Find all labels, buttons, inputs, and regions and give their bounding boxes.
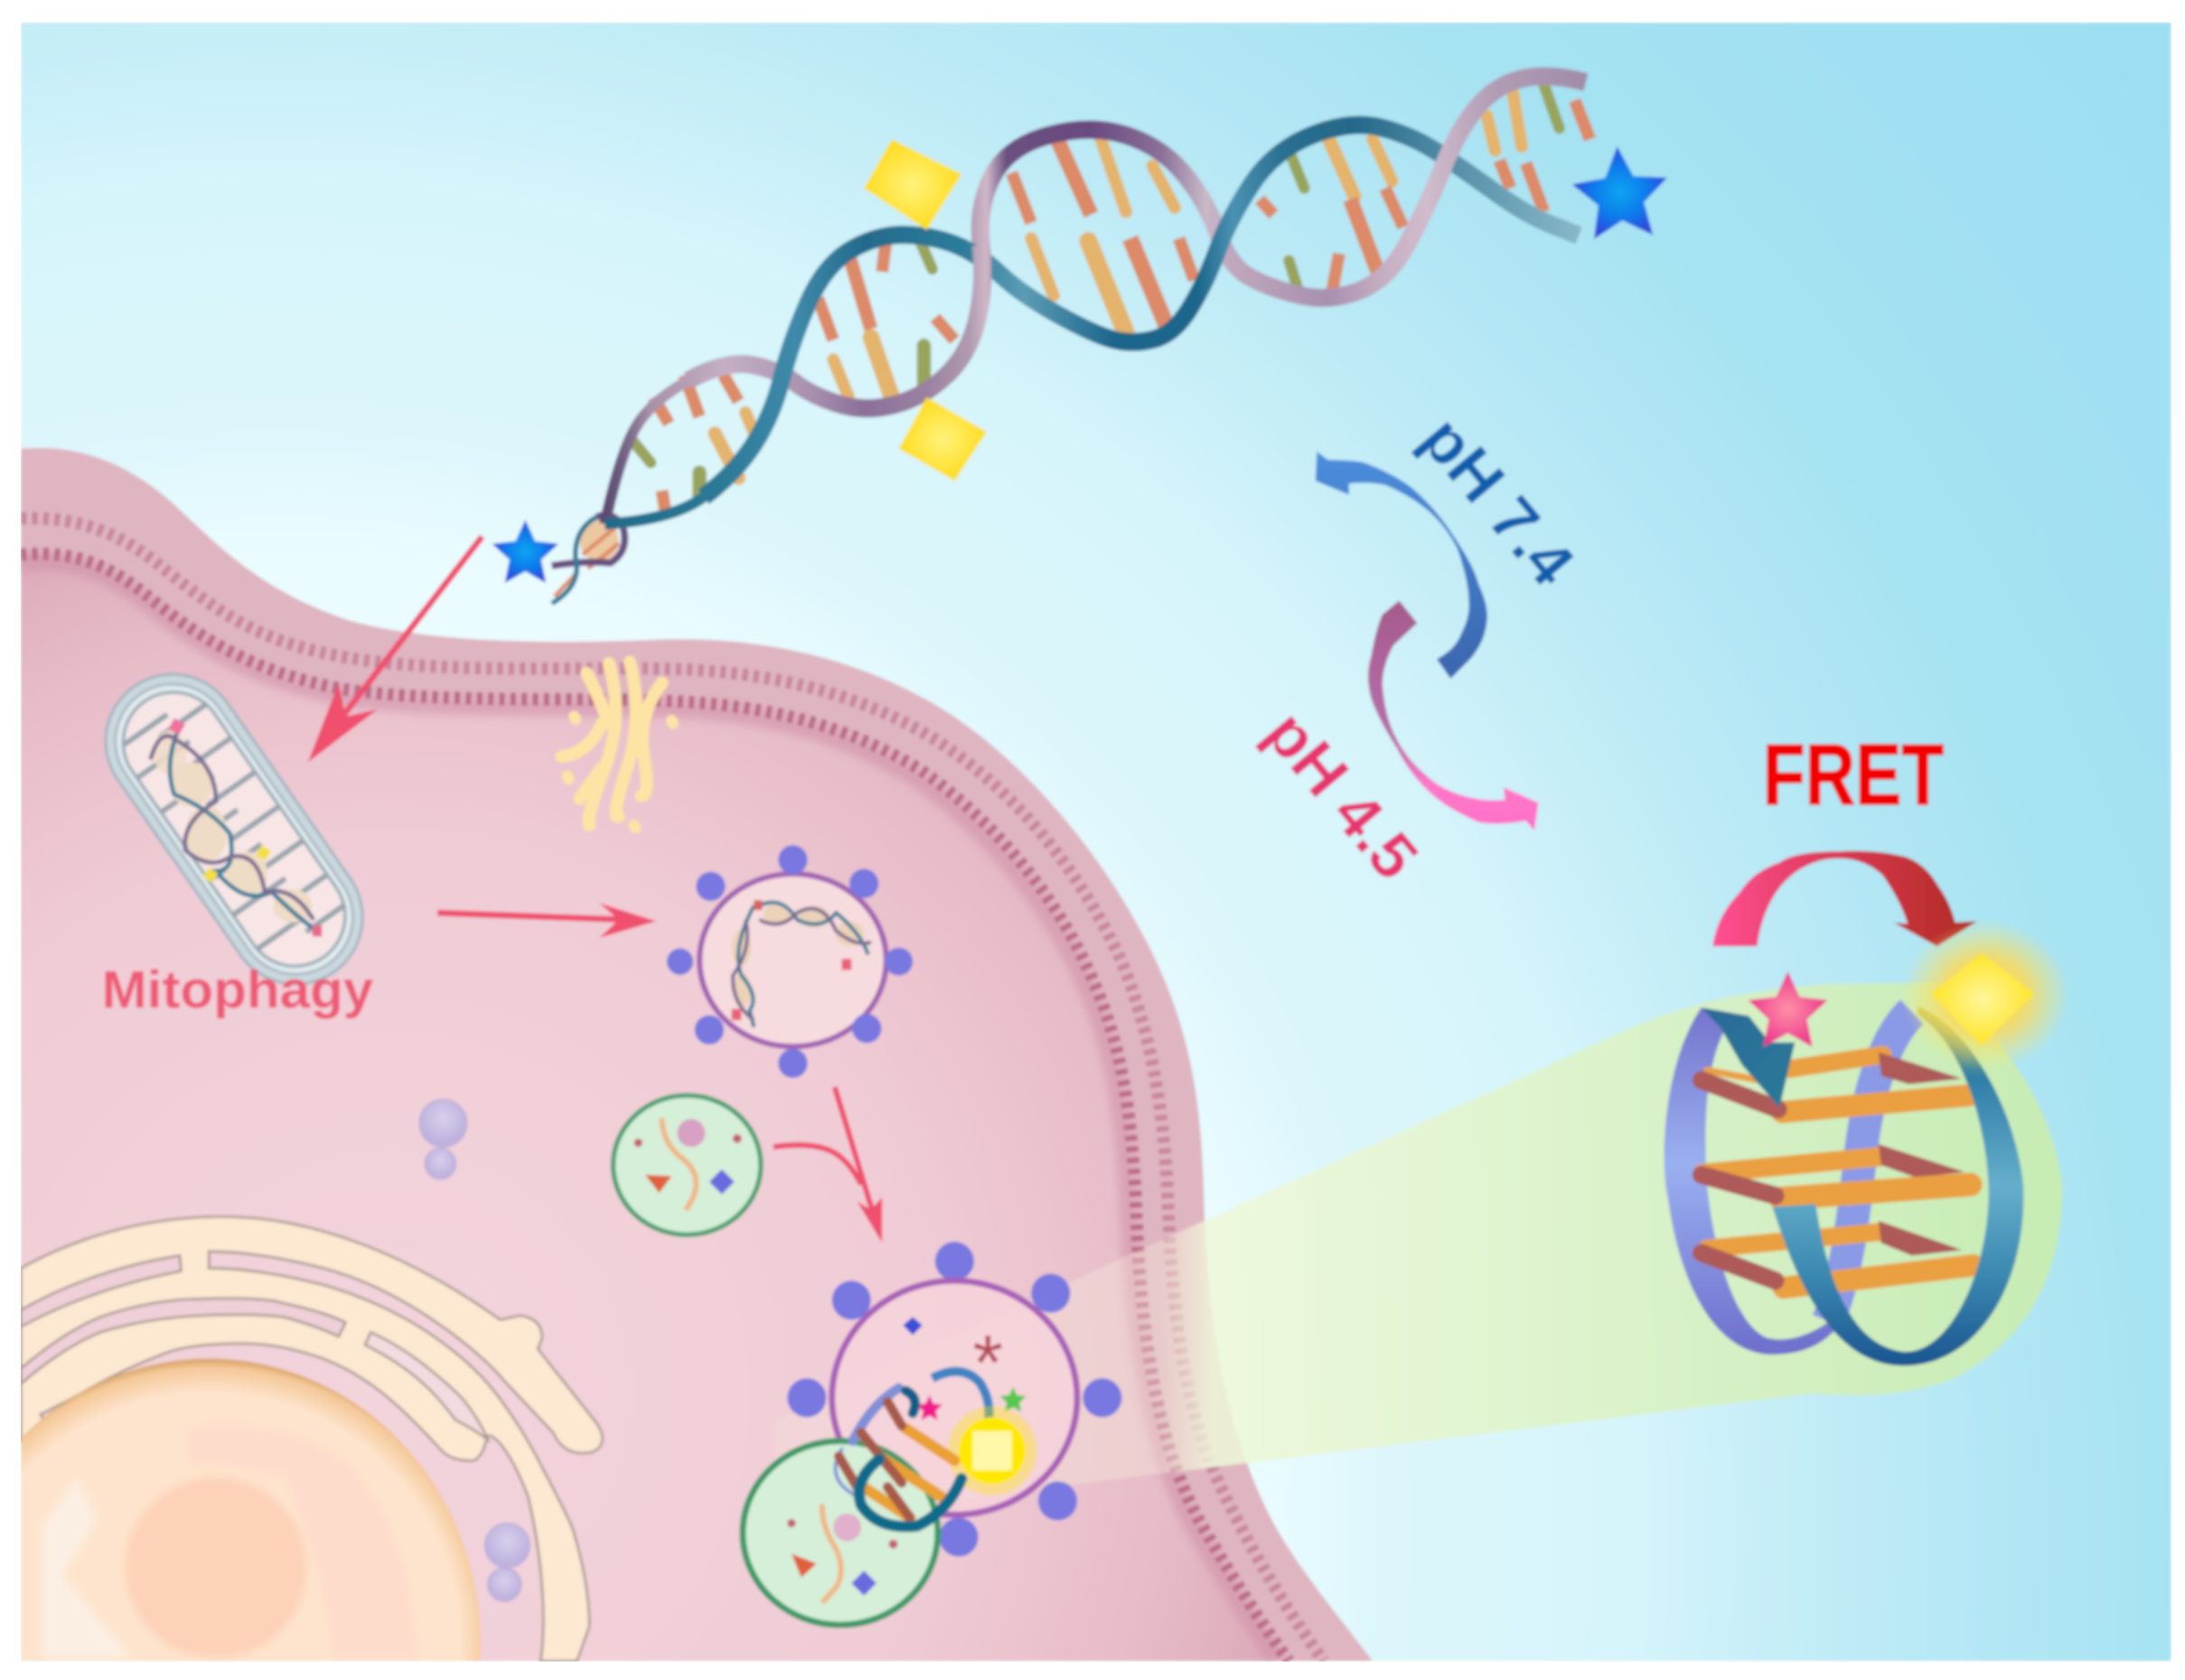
ER slit right: [365, 1332, 488, 1440]
mini G-quadruplex: [835, 1388, 961, 1526]
membrane inner shadow: [21, 562, 1275, 1658]
Mitophagy label: Mitophagy: [102, 961, 374, 1019]
ER slit left: [21, 1255, 181, 1327]
arrow: autophagosome to autolysosome: [774, 1087, 882, 1244]
G-quadruplex detail: [1664, 1006, 2023, 1366]
vesicles in cytoplasm: [419, 1100, 467, 1179]
blue donor star right: [1570, 143, 1671, 240]
lysosome: [614, 1095, 761, 1234]
autolysosome membrane: [832, 1281, 1077, 1515]
lysosome bumps: [787, 1242, 1121, 1557]
left ribbon: [1664, 1008, 1846, 1355]
autophagosome: [667, 845, 913, 1078]
FRET magnification beam: [987, 981, 2064, 1488]
cargo marker: red asterisk: *: [972, 1319, 1003, 1406]
outer membrane dashes: [21, 518, 1324, 1661]
autolysosome: [743, 1242, 1121, 1625]
dark top-left ribbon: [1702, 1008, 1795, 1108]
glowing acceptor diamond: [1902, 920, 2069, 1070]
cytoplasm: [21, 554, 1289, 1661]
strand crossovers: [947, 108, 1477, 375]
yellow acceptor lower: [899, 398, 987, 481]
pale nucleus patch: [42, 1478, 132, 1658]
tetrad level 3: [1702, 1221, 1974, 1288]
pink donor star: [1749, 971, 1827, 1047]
endoplasmic reticulum and nucleus: [21, 1216, 603, 1661]
cargo marker: blue diamond: [903, 1317, 923, 1335]
blue donor star left: [492, 520, 558, 583]
chromatin patches: [188, 1425, 418, 1658]
pH 7.4 label: pH 7.4: [1408, 404, 1588, 599]
arrow: pH 4.5: [1368, 601, 1538, 831]
arrow: pH 7.4: [1316, 452, 1487, 679]
lysosome contents: [787, 1506, 897, 1601]
pH 4.5 label: pH 4.5: [1252, 698, 1431, 893]
fused lysosome vesicle: [743, 1441, 938, 1625]
cell: [21, 448, 1373, 1661]
endoplasmic reticulum: [21, 1216, 603, 1661]
arrow: mitochondrion to autophagosome: [437, 903, 656, 938]
golgi apparatus: [561, 662, 673, 828]
DNA double helix: [552, 76, 1590, 604]
strand purple: [605, 76, 1586, 524]
tiny helix tail: [552, 515, 624, 604]
back ribbon strip: [1828, 1012, 1912, 1321]
base pairs: [632, 80, 1590, 516]
mitochondrion: [80, 648, 389, 1010]
arrow: DNA to mitochondrion: [308, 537, 483, 763]
cell membrane band: [21, 448, 1373, 1661]
mini FRET arrow: [933, 1372, 989, 1426]
glowing acceptor: [948, 1406, 1036, 1496]
yellow acceptor upper: [864, 139, 961, 230]
cargo marker: pink star: [916, 1395, 942, 1421]
DNA inside mitochondrion: [151, 718, 322, 936]
DNA inside autophagosome: [732, 900, 871, 1028]
tetrad level 2: [1702, 1144, 1971, 1198]
vesicles near nucleus: [485, 1524, 530, 1601]
strand teal: [605, 125, 1579, 524]
nucleus: [21, 1358, 481, 1661]
FRET label: FRET: [1763, 727, 1944, 823]
cargo marker: green star: [999, 1386, 1027, 1412]
right ribbon: [1773, 1006, 2023, 1366]
arrow: FRET energy transfer: [1712, 851, 1977, 946]
inner membrane dashes: [21, 554, 1289, 1661]
ER slit middle: [21, 1299, 345, 1384]
nucleolus: [126, 1478, 306, 1658]
tetrad level 1: [1702, 1052, 1969, 1112]
